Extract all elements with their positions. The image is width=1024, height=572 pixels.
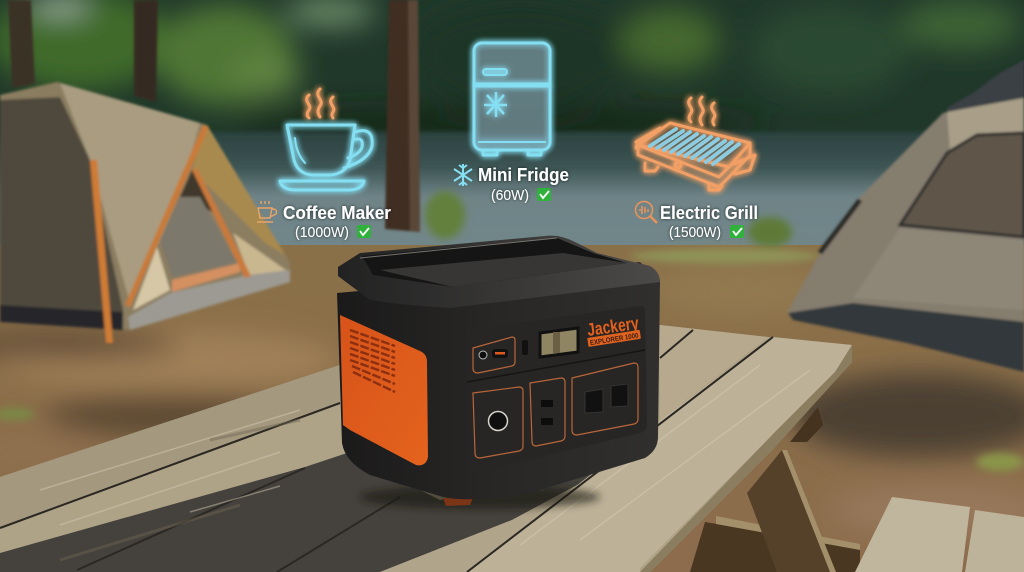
LCD display	[540, 328, 578, 357]
plank end face	[640, 345, 852, 572]
appliance: coffee maker	[257, 89, 391, 241]
brand logo: Jackery	[586, 313, 640, 340]
icon: coffee cup	[280, 89, 372, 190]
top ports	[473, 337, 515, 373]
wattage: 60W: (60W)	[491, 187, 529, 204]
check badge	[537, 188, 551, 201]
icon: fridge	[474, 43, 550, 155]
AC outlets	[572, 363, 638, 435]
vent grille	[350, 330, 395, 392]
icon: grill	[636, 97, 755, 190]
check badge	[730, 225, 744, 238]
label: coffee maker: Coffee Maker	[283, 203, 391, 223]
plank: right	[467, 337, 852, 572]
wattage: 1500W: (1500W)	[669, 224, 721, 241]
model label: EXPLORER 1000	[590, 333, 639, 347]
wattage: 1000W: (1000W)	[295, 224, 349, 241]
station foot	[443, 498, 473, 506]
station lid and handle	[338, 236, 660, 308]
bench	[855, 497, 1024, 572]
DC port	[473, 387, 523, 458]
plank: shadowed front	[0, 453, 620, 572]
tree trunks	[8, 0, 420, 232]
right tent	[787, 60, 1024, 372]
appliance: electric grill	[636, 97, 758, 241]
icon: small cup	[257, 201, 276, 222]
plank: back left	[0, 365, 340, 528]
icon: snowflake	[454, 164, 472, 186]
table top planks	[0, 325, 852, 572]
label: mini fridge: Mini Fridge	[478, 165, 569, 185]
label: electric grill: Electric Grill	[660, 203, 758, 223]
power station shadow	[360, 485, 600, 509]
station body	[337, 262, 660, 499]
front control panel	[467, 306, 647, 472]
picnic table	[0, 325, 1024, 572]
check badge	[357, 225, 371, 238]
appliance: mini fridge	[454, 43, 569, 204]
icon: magnifier with flame	[636, 202, 657, 223]
power station	[337, 236, 660, 506]
USB ports	[530, 378, 565, 446]
table legs	[690, 407, 860, 572]
orange side panel	[340, 315, 428, 465]
left tent	[0, 82, 290, 343]
